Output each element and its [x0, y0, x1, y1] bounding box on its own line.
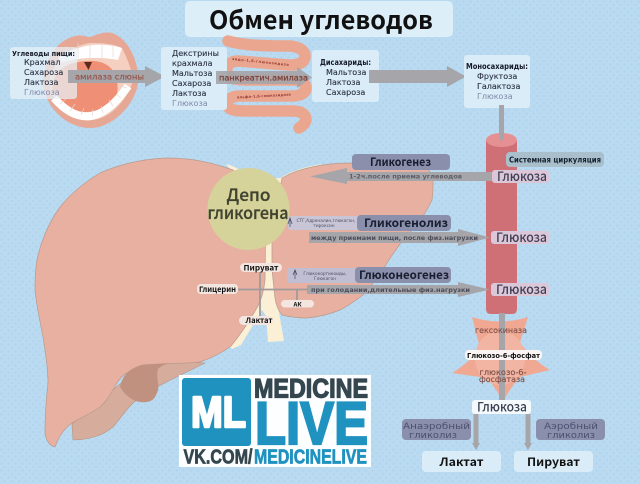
panel: dextrins — [161, 47, 227, 110]
arrow: pancreatic amylase — [216, 67, 312, 88]
arrow: monosaccharides to vessel — [499, 105, 504, 142]
label: anaerobic glycolysis: Анаэробный — [403, 422, 470, 432]
label: anaerobic glycolysis — [402, 419, 471, 441]
text: glucose-6-phosphatase: глюкозо-6- — [480, 368, 527, 377]
icon: intestine: эндо-1,6-глюкозидаза — [232, 57, 289, 67]
callout: glycogenolysis hormones: тироксин — [313, 224, 335, 229]
panel: monosaccharides — [464, 55, 530, 108]
arrow: vessel to glucose — [499, 313, 505, 401]
callout: gluconeogenesis hormones: Глюкокортикоиды, — [303, 271, 347, 277]
panel: monosaccharides: Моносахариды: — [466, 62, 528, 71]
arrow: to lactate — [472, 414, 480, 450]
arrow: glycogenesis: 1-2ч.после приема углеводов — [349, 174, 462, 180]
label: anaerobic glycolysis: гликолиз — [409, 431, 458, 441]
label: systemic circulation — [506, 152, 604, 167]
arrow: during fasting: при голодании,длительные физ.нагрузки — [311, 286, 470, 294]
logo: MedicineLive: MEDICINE — [254, 374, 368, 404]
panel: dextrins: Сахароза — [172, 79, 211, 88]
arrow: salivary amylase — [68, 66, 165, 87]
logo: MedicineLive: ML — [191, 388, 246, 437]
icon: intestine — [227, 41, 306, 128]
label: glucose 1: Глюкоза — [497, 166, 547, 185]
panel: dietary carbohydrates: Крахмал — [24, 58, 60, 67]
callout: glycogenolysis hormones: СТГ,Адреналин,глюкагон, — [297, 218, 355, 224]
label: aerobic glycolysis: Аэробный — [544, 422, 598, 432]
panel: dextrins: Глюкоза — [172, 99, 208, 108]
panel: disaccharides: Мальтоза — [326, 68, 366, 77]
panel: monosaccharides: Глюкоза — [477, 92, 513, 101]
callout: glycogen depot: Депо — [226, 181, 270, 206]
vessel: systemic circulation — [486, 133, 517, 314]
panel: dietary carbohydrates — [10, 47, 77, 99]
arrow: disaccharides to monosaccharides — [369, 66, 466, 87]
arrow: glycogenesis — [310, 168, 492, 184]
panel: lactate — [422, 451, 501, 472]
label: glycogenesis: Гликогенез — [370, 154, 431, 170]
panel: dietary carbohydrates: Сахароза — [24, 68, 63, 77]
label: systemic circulation: Системная циркуляция — [509, 156, 601, 164]
callout: glycogen depot — [208, 168, 290, 250]
callout: glycogen depot: гликогена — [208, 199, 288, 224]
text: glucose-6-phosphatase: фосфатаза — [479, 375, 525, 384]
label: glycogenolysis: Гликогенолиз — [364, 215, 448, 231]
panel: disaccharides: Лактоза — [326, 78, 361, 87]
callout: gluconeogenesis hormones — [287, 268, 359, 283]
callout: glycogenolysis hormones — [288, 216, 360, 230]
illustration: hepatocyte — [452, 317, 550, 402]
arrow: between meals: между приемами пищи, после физ.нагрузки — [311, 234, 478, 242]
title: Обмен углеводов — [209, 1, 433, 37]
icon: open mouth — [43, 33, 138, 128]
panel: pyruvate — [514, 451, 593, 472]
diagram: gluconeogenesis substrates: Лактат — [244, 315, 272, 326]
icon: intestine: альфа-1,6-глюкозидаза — [237, 93, 291, 99]
panel: pyruvate: Пируват — [527, 454, 580, 470]
label: gluconeogenesis: Глюконеогенез — [359, 267, 449, 283]
diagram: gluconeogenesis substrates: АК — [292, 300, 302, 308]
diagram: gluconeogenesis substrates: Пируват — [244, 262, 278, 274]
text: hexokinase: гексокиназа — [475, 326, 527, 335]
panel: disaccharides: Дисахариды: — [320, 58, 371, 67]
label: glucose: Глюкоза — [477, 396, 527, 416]
panel: dextrins: крахмала — [172, 59, 213, 68]
logo: MedicineLive: LIVE — [255, 390, 368, 457]
panel: monosaccharides: Галактоза — [477, 82, 520, 91]
panel: dietary carbohydrates: Углеводы пищи: — [12, 49, 75, 58]
arrow: between meals — [309, 229, 490, 246]
panel: monosaccharides: Фруктоза — [477, 72, 517, 81]
label: aerobic glycolysis: гликолиз — [547, 431, 596, 441]
panel: dextrins: Мальтоза — [172, 69, 212, 78]
diagram: gluconeogenesis substrates — [197, 262, 314, 326]
label: glucose-6-phosphate: Глюкозо-6-фосфат — [467, 352, 540, 360]
panel: disaccharides: Сахароза — [326, 88, 365, 97]
arrow: pancreatic amylase: панкреатич.амилаза — [219, 72, 308, 82]
label: glucose 3: Глюкоза — [496, 279, 547, 298]
arrow: to pyruvate — [524, 414, 532, 450]
illustration: liver — [35, 158, 433, 447]
label: aerobic glycolysis — [536, 419, 605, 441]
panel: lactate: Лактат — [438, 454, 484, 470]
arrow: during fasting — [307, 282, 490, 297]
label: glucose 2: Глюкоза — [496, 227, 547, 246]
logo: MedicineLive: MEDICINELIVE — [254, 446, 367, 468]
panel: dextrins: Декстрины — [172, 49, 219, 58]
logo: MedicineLive — [179, 374, 371, 468]
panel: dextrins: Лактоза — [172, 89, 207, 98]
arrow: salivary amylase: амилаза слюны — [75, 72, 144, 82]
text: glucose-6-phosphatase — [479, 368, 527, 384]
label: glycogenesis — [352, 154, 450, 170]
diagram: gluconeogenesis substrates: Глицерин — [199, 284, 236, 295]
panel: dietary carbohydrates: Глюкоза — [24, 88, 60, 97]
panel: disaccharides — [312, 50, 379, 102]
callout: gluconeogenesis hormones: Глюкагон — [314, 276, 336, 282]
logo: MedicineLive: VK.COM/ — [184, 446, 253, 468]
panel: dietary carbohydrates: Лактоза — [24, 78, 59, 87]
